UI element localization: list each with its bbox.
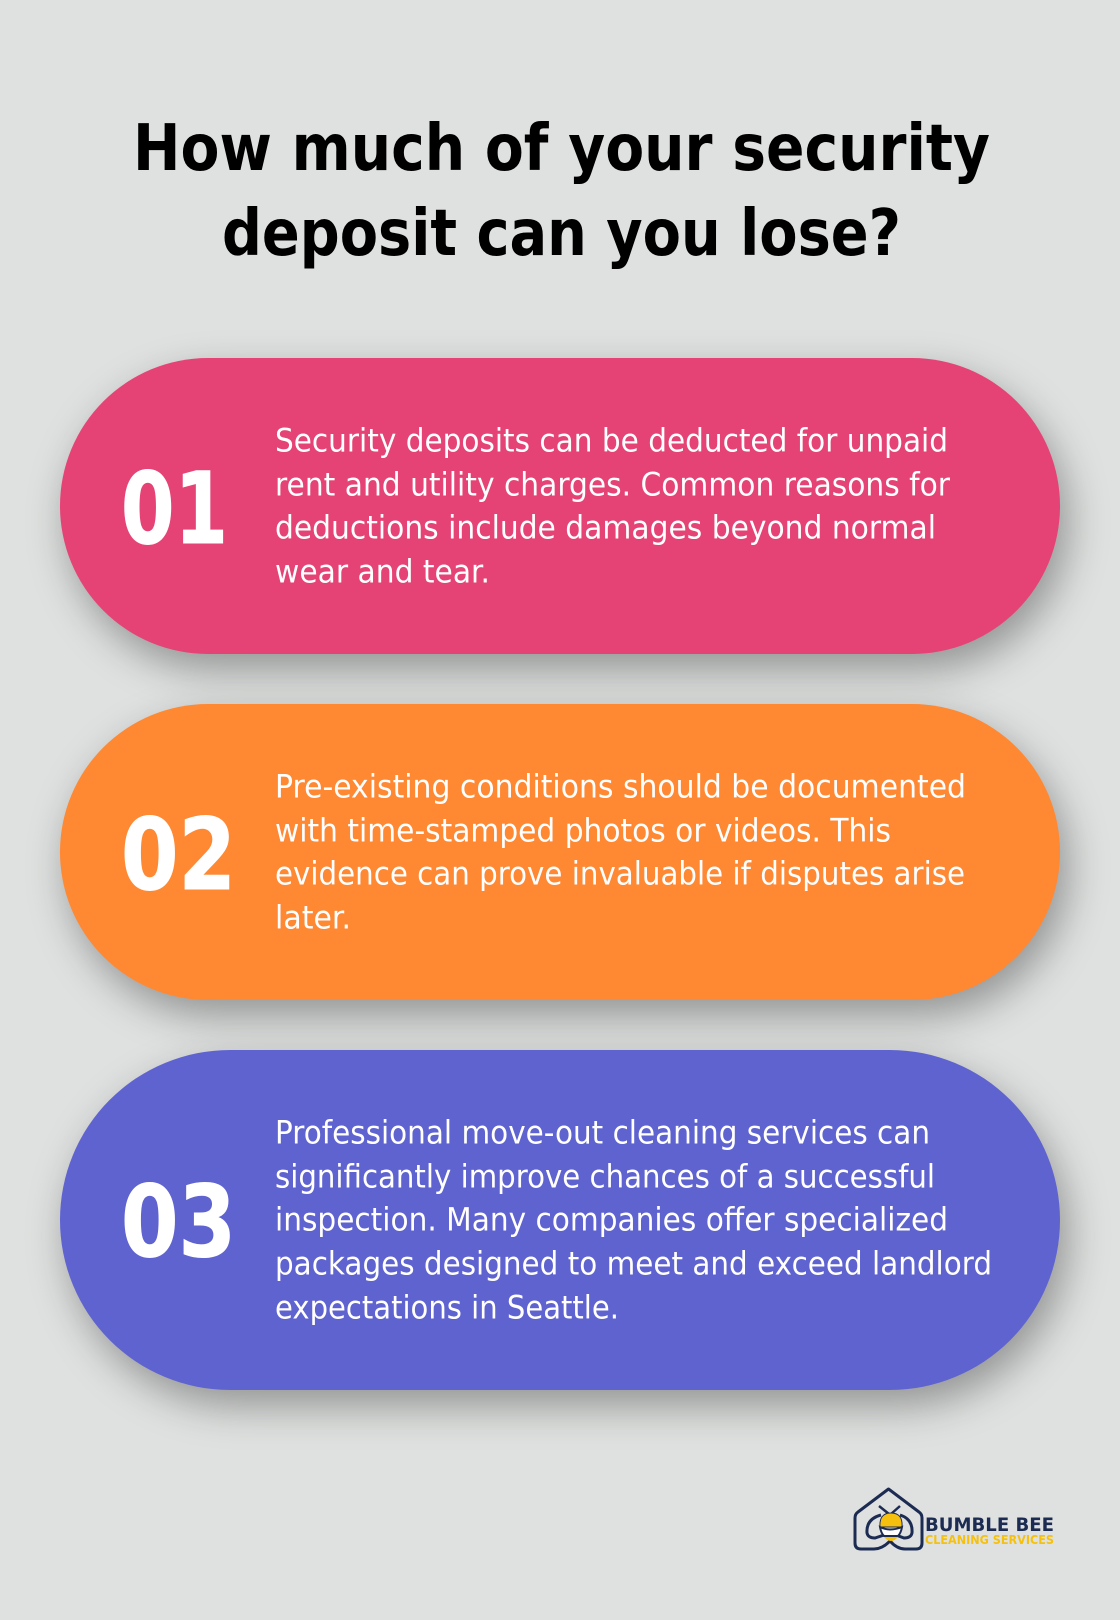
text: step 02 description: Pre-existing conditions should be documented bbox=[275, 768, 966, 806]
text: step 03 description: inspection. Many companies offer specialized bbox=[275, 1200, 948, 1238]
text: step 01 description: wear and tear. bbox=[275, 552, 490, 590]
logo: Bumble Bee Cleaning Services bbox=[854, 1488, 1054, 1550]
text: step 03 description: Professional move-out cleaning services can bbox=[275, 1114, 930, 1152]
panel: step 02 bbox=[60, 704, 1060, 1000]
text: step 03 description: significantly improve chances of a successful bbox=[275, 1158, 935, 1196]
wordmark: BUMBLE BEE bbox=[925, 1514, 1054, 1536]
wordmark: CLEANING SERVICES bbox=[925, 1533, 1054, 1547]
text: step 01 description bbox=[275, 422, 951, 590]
number 03: 03 bbox=[121, 1165, 236, 1280]
panel: step 03 bbox=[60, 1050, 1060, 1390]
text: step 02 description: later. bbox=[275, 898, 351, 936]
text: step 01 description: Security deposits can be deducted for unpaid bbox=[275, 422, 948, 460]
text: step 01 description: rent and utility charges. Common reasons for bbox=[275, 466, 951, 504]
title bbox=[133, 112, 990, 271]
text: step 03 description: packages designed to meet and exceed landlord bbox=[275, 1244, 992, 1282]
text: step 02 description: with time-stamped photos or videos. This bbox=[275, 812, 891, 850]
panel: step 01 bbox=[60, 358, 1060, 654]
text: step 03 description bbox=[275, 1114, 992, 1326]
wordmark bbox=[925, 1514, 1054, 1547]
text: step 03 description: expectations in Seattle. bbox=[275, 1288, 619, 1326]
icon: house with bee bbox=[855, 1489, 922, 1549]
number 02: 02 bbox=[121, 798, 236, 913]
number 01: 01 bbox=[121, 452, 228, 567]
text: step 02 description bbox=[275, 768, 966, 936]
text: step 01 description: deductions include damages beyond normal bbox=[275, 508, 936, 546]
text: step 02 description: evidence can prove invaluable if disputes arise bbox=[275, 854, 965, 892]
title: deposit can you lose? bbox=[222, 197, 901, 271]
